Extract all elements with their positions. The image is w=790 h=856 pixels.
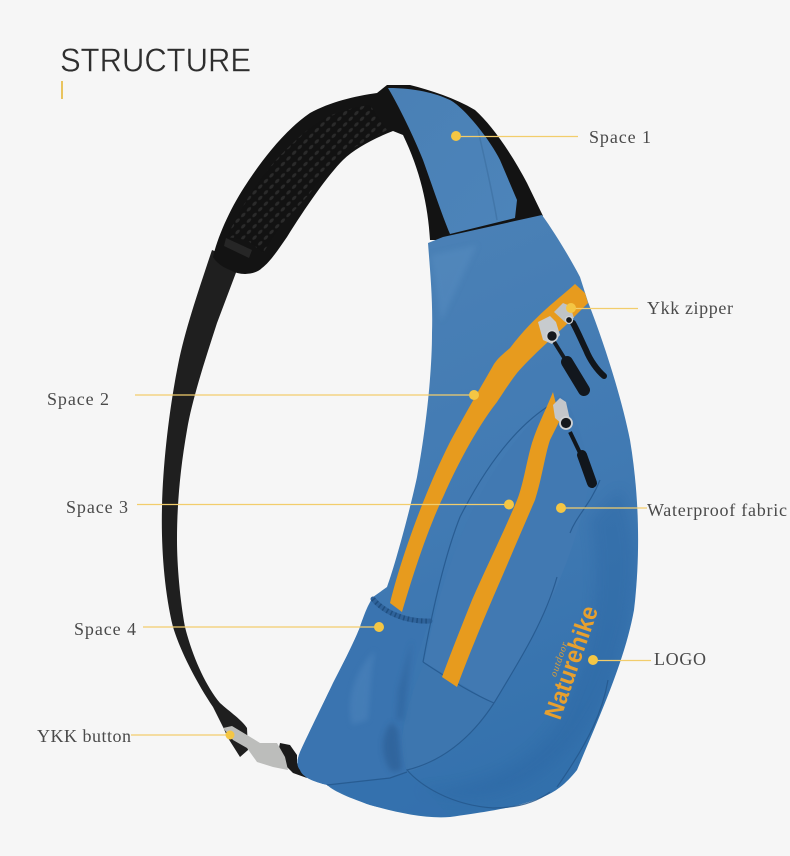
callout: Space 3	[66, 497, 514, 517]
callout: Waterproof fabric: Waterproof fabric	[647, 500, 787, 520]
callout: Space 4: Space 4	[74, 619, 136, 639]
title: STRUCTURE	[60, 42, 251, 78]
shoulder strap	[162, 250, 248, 757]
main body	[297, 215, 638, 817]
panel seams	[327, 407, 608, 808]
zipper pull 1	[538, 316, 584, 390]
Naturehike logo: Naturehike	[539, 602, 604, 723]
callout: Space 3: Space 3	[66, 497, 128, 517]
callout: Waterproof fabric	[556, 500, 787, 520]
callout: YKK button: YKK button	[37, 726, 131, 746]
strap end at bag	[277, 743, 307, 778]
bag illustration	[162, 85, 638, 817]
callout: Space 1	[451, 127, 651, 147]
Naturehike logo: outdoor	[548, 641, 571, 678]
callout: Ykk zipper: Ykk zipper	[647, 298, 733, 318]
callout: YKK button	[37, 726, 234, 746]
callout: LOGO	[588, 649, 706, 669]
padded shoulder section	[213, 85, 543, 274]
orange zip 2	[442, 392, 560, 687]
callout: Space 1: Space 1	[589, 127, 651, 147]
pocket folds	[383, 722, 402, 772]
callout: Space 2: Space 2	[47, 389, 109, 409]
title accent bar	[61, 81, 63, 99]
callout: Ykk zipper	[566, 298, 733, 318]
callout: Space 4	[74, 619, 384, 639]
pocket elastic	[373, 599, 430, 621]
orange zip 1	[390, 284, 588, 612]
zipper pull 3	[553, 398, 592, 483]
side mesh pocket	[297, 618, 364, 785]
YKK buckle	[223, 726, 288, 770]
zipper pull 2	[554, 303, 604, 376]
callout: Space 2	[47, 389, 479, 409]
body shading	[297, 288, 571, 808]
callout: LOGO: LOGO	[654, 649, 706, 669]
compartment seam	[478, 130, 497, 220]
top shoulder compartment	[388, 88, 517, 234]
